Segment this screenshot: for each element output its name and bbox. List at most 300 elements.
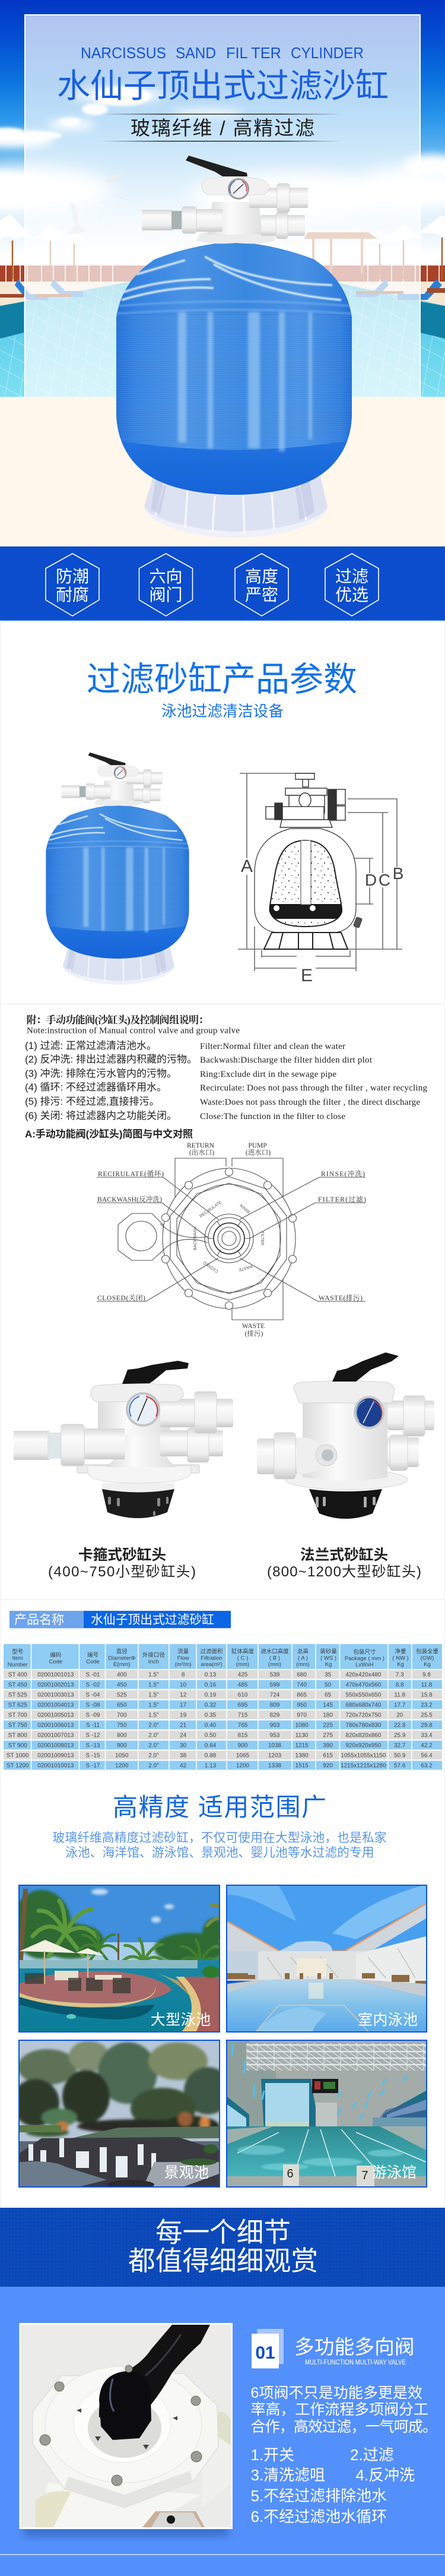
table rows: 950 — [297, 1702, 307, 1708]
detail description — [250, 2385, 437, 2435]
table rows: 1.5" — [148, 1671, 159, 1679]
subtitle: 玻璃纤维 / 高精过滤 — [131, 117, 314, 139]
table rows: 724 — [270, 1692, 280, 1699]
table rows: 829 — [270, 1712, 280, 1719]
table header: Kg — [397, 1661, 404, 1668]
drain plug — [354, 917, 362, 928]
table rows: 10 — [180, 1682, 187, 1688]
callout labels: WASTE(排污) — [319, 1294, 363, 1302]
table header: 总高 — [297, 1648, 309, 1655]
label E: E — [301, 966, 313, 985]
chinese function list: (3) 冲洗: 排除在污水管内的污物。 — [25, 1068, 177, 1079]
dimension diagram — [238, 773, 402, 971]
table rows: ST 700 — [8, 1712, 27, 1719]
caption: natatorium: 游泳馆 — [372, 2164, 417, 2181]
table header: Number — [8, 1662, 28, 1668]
table rows: 780x780x830 — [345, 1722, 382, 1728]
label A: A — [241, 856, 253, 876]
table rows: 610 — [238, 1692, 248, 1699]
table header: 包装尺寸 — [353, 1649, 376, 1656]
photo: indoor pool — [226, 1885, 427, 2033]
table header: DiameterΦ — [108, 1655, 136, 1662]
main title: 水仙子顶出式过滤沙缸 — [57, 67, 389, 105]
name label: 产品名称 — [14, 1613, 64, 1627]
lane number 6: 6 — [287, 2167, 294, 2180]
schematic labels — [187, 1142, 271, 1338]
function list: 4.反冲洗 — [356, 2466, 415, 2484]
table rows: 1338 — [268, 1763, 282, 1769]
table header: Kg — [325, 1661, 332, 1668]
table rows: ST 400 — [8, 1671, 27, 1679]
table rows: ST 800 — [8, 1732, 27, 1739]
english function list: Filter:Normal filter and clean the water — [200, 1042, 345, 1051]
table header: Code — [86, 1658, 100, 1665]
table rows: 38 — [180, 1752, 187, 1759]
table rows: 02001001013 — [37, 1671, 74, 1679]
table rows: 903 — [270, 1722, 280, 1728]
table rows: 02001006013 — [37, 1722, 74, 1728]
table header: 包装全重 — [416, 1648, 438, 1655]
table header: Flow — [177, 1655, 189, 1662]
tank outline — [255, 829, 356, 933]
table rows: 920x920x950 — [345, 1743, 382, 1749]
table rows: 02001005013 — [37, 1712, 74, 1719]
table rows: 0.16 — [205, 1682, 217, 1688]
table rows: 50 — [325, 1682, 332, 1688]
table rows: 1215x1215x1280 — [341, 1763, 386, 1769]
port label: return: RETURN — [187, 1142, 215, 1149]
table rows: 765 — [238, 1722, 248, 1728]
table rows: 0.88 — [205, 1752, 217, 1759]
table rows: 21 — [180, 1722, 187, 1728]
table rows: ST 525 — [8, 1692, 27, 1699]
port label: return: (出水口) — [189, 1148, 214, 1156]
table rows: 720x720x750 — [345, 1712, 382, 1719]
table rows: S -08 — [86, 1702, 100, 1708]
table rows: 539 — [270, 1671, 280, 1679]
dimension labels — [241, 856, 403, 985]
english function list: Close:The function in the filter to close — [200, 1112, 345, 1121]
table rows: 599 — [270, 1682, 280, 1688]
table rows: 29.8 — [421, 1722, 433, 1728]
table rows: S -01 — [86, 1671, 100, 1679]
caption: large pool: 大型泳池 — [151, 2012, 211, 2028]
table rows: 715 — [238, 1712, 248, 1719]
table rows: 809 — [270, 1702, 280, 1708]
table rows: 1200 — [236, 1763, 250, 1769]
table rows: 0.35 — [205, 1712, 217, 1719]
table rows: 2.0" — [148, 1732, 159, 1739]
product name bar — [9, 1611, 231, 1629]
detail description: 率高，工作流程多项阀分工 — [250, 2401, 428, 2418]
table rows: 15.8 — [421, 1692, 433, 1699]
chinese function list: (6) 关闭: 将过滤器内之功能关闭。 — [25, 1110, 177, 1121]
table header: (mm) — [296, 1661, 310, 1668]
table rows: 1038 — [268, 1743, 282, 1749]
callout labels — [97, 1170, 366, 1302]
table rows: 1050 — [115, 1752, 129, 1759]
table rows: 02001009013 — [37, 1752, 74, 1759]
number badge 01: 01 — [255, 2343, 275, 2363]
panel: hero banner — [0, 0, 445, 546]
table rows: 32.7 — [394, 1743, 406, 1749]
table header: 进水口高度 — [260, 1648, 289, 1655]
tank base — [264, 933, 348, 949]
name value: 水仙子顶出式过滤砂缸 — [91, 1613, 214, 1627]
english subtitle: NARCISSUS — [81, 44, 166, 62]
table rows: 470x470x560 — [345, 1682, 382, 1688]
table rows: 750 — [117, 1722, 127, 1728]
table header: Inch — [148, 1658, 159, 1665]
table rows: 2.0" — [148, 1722, 159, 1728]
english function list: Waste:Does not pass through the filter , the direct discharge — [200, 1098, 420, 1107]
table rows: 225 — [323, 1722, 333, 1728]
table rows: 02001003013 — [37, 1692, 74, 1699]
table rows: 1.5" — [148, 1682, 159, 1688]
table rows: 1.5" — [148, 1712, 159, 1719]
caption: flange-type valve head: 法兰式砂缸头 — [300, 1546, 388, 1563]
dial position labels: FILTER — [260, 1231, 264, 1246]
table rows: 680x680x740 — [345, 1702, 382, 1708]
table rows: 680 — [297, 1671, 307, 1679]
table rows: 02001008013 — [37, 1743, 74, 1749]
table rows: 02001007013 — [37, 1732, 74, 1739]
table header: ( NW ) — [392, 1655, 409, 1662]
table rows: 2.0" — [148, 1752, 159, 1759]
table rows: 0.32 — [205, 1702, 217, 1708]
description text: 泳池、海洋馆、游泳馆、景观池、婴儿池等水过滤的专用 — [65, 1846, 374, 1860]
port label: waste: (排污) — [245, 1329, 263, 1338]
table header: (mm) — [268, 1661, 281, 1668]
table rows: 900 — [238, 1743, 248, 1749]
table rows: 0.50 — [205, 1732, 217, 1739]
table rows: 9.8 — [422, 1671, 431, 1679]
hexagon: six-way valve — [139, 554, 192, 616]
chinese function list: (5) 排污: 不经过滤,直接排污。 — [25, 1096, 160, 1107]
table rows: 953 — [270, 1732, 280, 1739]
table rows: S -12 — [86, 1732, 100, 1739]
hexagon: six-way valve: 阀门 — [149, 586, 183, 604]
panel: flange-type valve photo — [257, 1352, 434, 1580]
table rows: 740 — [297, 1682, 307, 1688]
dial position labels: BACKWASH — [193, 1227, 198, 1250]
table rows: 0.13 — [205, 1671, 217, 1679]
port label: return — [187, 1142, 215, 1156]
table rows: 11.8 — [394, 1692, 405, 1699]
description text: 玻璃纤维高精度过滤砂缸，不仅可使用在大型泳池，也是私家 — [52, 1831, 387, 1845]
function list: 6.不经过滤池水循环 — [250, 2508, 387, 2526]
table header: 过滤面积 — [200, 1648, 223, 1655]
table rows: 02001002013 — [37, 1682, 74, 1688]
table rows: 865 — [297, 1692, 307, 1699]
table rows: 12 — [180, 1692, 187, 1699]
english subtitle: CYLINDER — [291, 44, 364, 62]
english subtitle — [81, 44, 364, 62]
table header: 编号 — [87, 1651, 98, 1658]
table rows: 2.0" — [148, 1743, 159, 1749]
dial position labels: CLOSED — [202, 1260, 219, 1273]
english function list: Recirculate: Does not pass through the filter , water recycling — [200, 1083, 427, 1093]
table rows: 1380 — [295, 1752, 309, 1759]
table rows: 180 — [323, 1712, 333, 1719]
callout labels: FILTER(过滤) — [318, 1195, 366, 1203]
table rows: 1.13 — [205, 1763, 217, 1769]
function list — [250, 2446, 415, 2526]
table rows: 1130 — [295, 1732, 309, 1739]
table rows: 275 — [323, 1732, 333, 1739]
table rows: 970 — [297, 1712, 307, 1719]
table rows: 1055x1055x1150 — [341, 1752, 386, 1759]
callout labels: BACKWASH(反冲洗) — [97, 1195, 162, 1203]
hexagon: six-way valve: 六向 — [149, 567, 183, 586]
function list: 1.开关 — [250, 2446, 294, 2464]
table header: 直径 — [116, 1648, 128, 1655]
subheading: pool filtration equipment: 泳池过滤清洁设备 — [161, 703, 284, 720]
tank inner media — [267, 840, 344, 927]
table rows: 2.0" — [148, 1763, 159, 1769]
table rows: 7.3 — [396, 1671, 404, 1679]
table rows: 57.6 — [394, 1763, 406, 1769]
table rows: 50.9 — [394, 1752, 406, 1759]
table rows: 0.40 — [205, 1722, 217, 1728]
table rows: 1.5" — [148, 1702, 159, 1708]
table header: Code — [49, 1658, 62, 1665]
table header: 编码 — [50, 1651, 61, 1658]
table rows: S -15 — [86, 1752, 100, 1759]
table header: 装砂量 — [320, 1648, 337, 1655]
dial position labels: RECIRULATE — [199, 1200, 223, 1219]
table rows: 1215 — [295, 1743, 309, 1749]
table rows: 695 — [238, 1702, 248, 1708]
table rows: 420x420x480 — [345, 1671, 382, 1679]
valve schematic — [97, 1142, 366, 1338]
table header: (GW) — [421, 1655, 434, 1662]
table header: ( A ) — [298, 1655, 308, 1662]
table rows: 450 — [117, 1682, 127, 1688]
caption: small sizes: (400~750小型砂缸头) — [48, 1564, 196, 1580]
hexagon: moisture and corrosion proof: 耐腐 — [56, 586, 89, 604]
table rows: 425 — [238, 1671, 248, 1679]
table rows: ST 450 — [8, 1682, 27, 1688]
photo: natatorium — [226, 2040, 427, 2188]
parameter table — [4, 1644, 442, 1770]
function list: 2.过滤 — [350, 2446, 394, 2464]
table header: area(m²) — [201, 1661, 223, 1668]
table rows: S -09 — [86, 1712, 100, 1719]
table header: E(mm) — [113, 1661, 131, 1668]
table header: 缸体高度 — [231, 1648, 254, 1655]
panel: details heading band — [0, 2208, 445, 2287]
table rows: 25.5 — [421, 1712, 433, 1719]
table header: Filtration — [201, 1655, 223, 1662]
table rows: 8.8 — [396, 1682, 404, 1688]
detail heading: 多功能多向阀 — [294, 2336, 415, 2359]
caption: landscape pool: 景观池 — [164, 2164, 209, 2181]
table rows: 1515 — [295, 1763, 309, 1769]
table header: LxWxH — [355, 1662, 374, 1668]
valve outline — [266, 773, 345, 827]
table rows: 650 — [117, 1702, 127, 1708]
function list: 3.清洗滤咀 — [250, 2466, 325, 2484]
dial position labels — [193, 1200, 264, 1273]
table header: 型号 — [12, 1649, 23, 1655]
callout labels: CLOSED(关闭) — [97, 1294, 145, 1302]
heading: high precision wide application: 高精度 适用范围广 — [113, 1793, 326, 1821]
table rows: 56.4 — [421, 1752, 433, 1759]
table rows: S -04 — [86, 1692, 100, 1699]
hero background: sky and resort pool — [0, 0, 445, 397]
drop shadow — [24, 2526, 228, 2536]
table rows: 25.9 — [394, 1732, 406, 1739]
table rows: 35 — [325, 1671, 332, 1679]
table rows: 1065 — [236, 1752, 250, 1759]
caption: large sizes: (800~1200大型砂缸头) — [267, 1564, 421, 1580]
english subtitle: SAND — [176, 44, 216, 62]
label B: B — [393, 864, 403, 883]
detail subheading english: MULTI-FUNCTION MULTI-WAY VALVE — [305, 2359, 406, 2366]
port label: waste — [242, 1323, 265, 1338]
table rows: 42 — [180, 1763, 187, 1769]
hexagon: moisture and corrosion proof: 防潮 — [56, 567, 89, 586]
cream lower background — [0, 397, 445, 546]
number badge 01 — [252, 2329, 284, 2369]
table header: 净重 — [395, 1648, 406, 1655]
table rows: S -13 — [86, 1743, 100, 1749]
table header: Package ( mm ) — [345, 1655, 384, 1662]
dimension lines — [238, 773, 402, 971]
english function list: Ring:Exclude dirt in the sewage pipe — [200, 1070, 336, 1079]
table rows: ST 625 — [8, 1702, 27, 1708]
table rows: 23.2 — [421, 1702, 433, 1708]
table rows: 02001010013 — [37, 1763, 74, 1769]
table rows: 02001004013 — [37, 1702, 74, 1708]
callout labels: RECIRULATE(循环) — [98, 1170, 164, 1178]
note heading english: Note:instruction of Manual control valve and group valve — [27, 1026, 240, 1036]
hexagon: preferred filtration: 过滤 — [335, 567, 368, 586]
table rows: S -17 — [86, 1763, 100, 1769]
table rows: 19 — [180, 1712, 187, 1719]
table header: ( WS ) — [320, 1655, 336, 1662]
table rows: 63.2 — [421, 1763, 433, 1769]
schematic linework — [97, 1158, 365, 1320]
table rows: 400 — [117, 1671, 127, 1679]
table rows: 1080 — [295, 1722, 309, 1728]
table rows: 900 — [117, 1743, 127, 1749]
hexagon: moisture and corrosion proof — [46, 554, 99, 616]
table rows: 17.7 — [394, 1702, 406, 1708]
dial position labels: WASTE — [238, 1264, 253, 1272]
callout labels: RINSE(冲洗) — [321, 1170, 365, 1178]
port label: waste: WASTE — [242, 1323, 265, 1330]
panel: feature hexagons band — [0, 546, 445, 621]
table rows: 65 — [325, 1692, 332, 1699]
photo: landscape pool — [12, 2040, 231, 2189]
chinese function list: (4) 循环: 不经过滤器循环用水。 — [25, 1082, 167, 1093]
table rows: 42.2 — [421, 1743, 433, 1749]
hexagon: high tightness — [235, 554, 288, 616]
detail description: 合作，高效过滤，一气呵成。 — [250, 2419, 437, 2435]
table rows: 1203 — [268, 1752, 282, 1759]
function list: 5.不经过滤排除池水 — [250, 2487, 387, 2505]
label C: C — [379, 871, 390, 889]
table rows: 24 — [180, 1732, 187, 1739]
table rows: S -11 — [86, 1722, 100, 1728]
dial position labels: RINSE — [239, 1204, 251, 1215]
table rows: ST 900 — [8, 1743, 27, 1749]
table rows: 0.64 — [205, 1743, 217, 1749]
table rows: 700 — [117, 1712, 127, 1719]
table rows: S -02 — [86, 1682, 100, 1688]
chinese function list: (1) 过滤: 正常过滤清洁池水。 — [25, 1040, 157, 1051]
table header: (m³/m) — [175, 1661, 192, 1668]
table rows: 815 — [238, 1732, 248, 1739]
hexagon: high tightness: 高度 — [245, 567, 278, 586]
table header: ( B ) — [269, 1655, 280, 1662]
detail photo: multi-way valve top — [19, 2323, 233, 2529]
table rows: 390 — [323, 1743, 333, 1749]
table rows: 800 — [117, 1732, 127, 1739]
flange valve body — [257, 1352, 434, 1519]
english subtitle: FIL TER — [226, 44, 281, 62]
diagram heading: A:手动功能阀(沙缸头)简图与中文对照 — [25, 1128, 193, 1140]
panel: valve detail — [0, 2287, 445, 2576]
english function list: Backwash:Discharge the filter hidden dirt plot — [200, 1055, 373, 1065]
table rows: 8 — [182, 1671, 185, 1679]
table rows: 17 — [180, 1702, 187, 1708]
table rows: ST 1000 — [7, 1752, 29, 1759]
table rows: 1.5" — [148, 1692, 159, 1699]
english function list — [200, 1042, 427, 1121]
panel: valve instruction notes — [25, 1014, 427, 1140]
lane number 7: 7 — [361, 2169, 368, 2182]
table rows: 0.19 — [205, 1692, 217, 1699]
table rows — [4, 1670, 442, 1770]
caption: clamp-type valve head: 卡箍式砂缸头 — [78, 1546, 166, 1563]
detail description: 6项阀不只是功能多更是效 — [250, 2385, 422, 2401]
table rows: 11.8 — [421, 1682, 433, 1688]
label D: D — [365, 871, 377, 889]
hexagon: preferred filtration: 优选 — [335, 586, 368, 604]
table rows: 30 — [180, 1743, 187, 1749]
table rows: 22.8 — [394, 1722, 406, 1728]
table rows: 920 — [323, 1763, 333, 1769]
table rows: 485 — [238, 1682, 248, 1688]
table header — [4, 1644, 442, 1669]
table header: 流量 — [177, 1648, 189, 1655]
table header: ( C ) — [237, 1655, 248, 1662]
product: sand filter tank with valve — [113, 156, 356, 538]
table rows: 525 — [117, 1692, 127, 1699]
photo: large pool — [18, 1885, 220, 2033]
description text — [52, 1831, 387, 1860]
table rows: ST 750 — [8, 1722, 27, 1728]
translucent framed overlay — [25, 15, 420, 409]
note heading chinese: 附：手动功能阀(沙缸头)及控制阀组说明： — [26, 1014, 209, 1026]
heading line 1: 每一个细节 — [155, 2217, 291, 2248]
port label: pump — [246, 1142, 271, 1156]
table rows: 820x820x860 — [345, 1732, 382, 1739]
port label: pump: PUMP — [248, 1142, 267, 1149]
subtitle rule top — [101, 114, 341, 115]
hexagon: preferred filtration — [325, 554, 379, 616]
table rows: 1200 — [115, 1763, 129, 1769]
caption: indoor pool: 室内泳池 — [358, 2012, 418, 2028]
panel: clamp-type valve photo — [14, 1361, 233, 1580]
table header: 外接口径 — [142, 1651, 165, 1658]
port label: pump: (进水口) — [246, 1148, 271, 1156]
hexagon: high tightness: 严密 — [245, 586, 278, 604]
lower clamp valve body — [14, 1361, 233, 1518]
